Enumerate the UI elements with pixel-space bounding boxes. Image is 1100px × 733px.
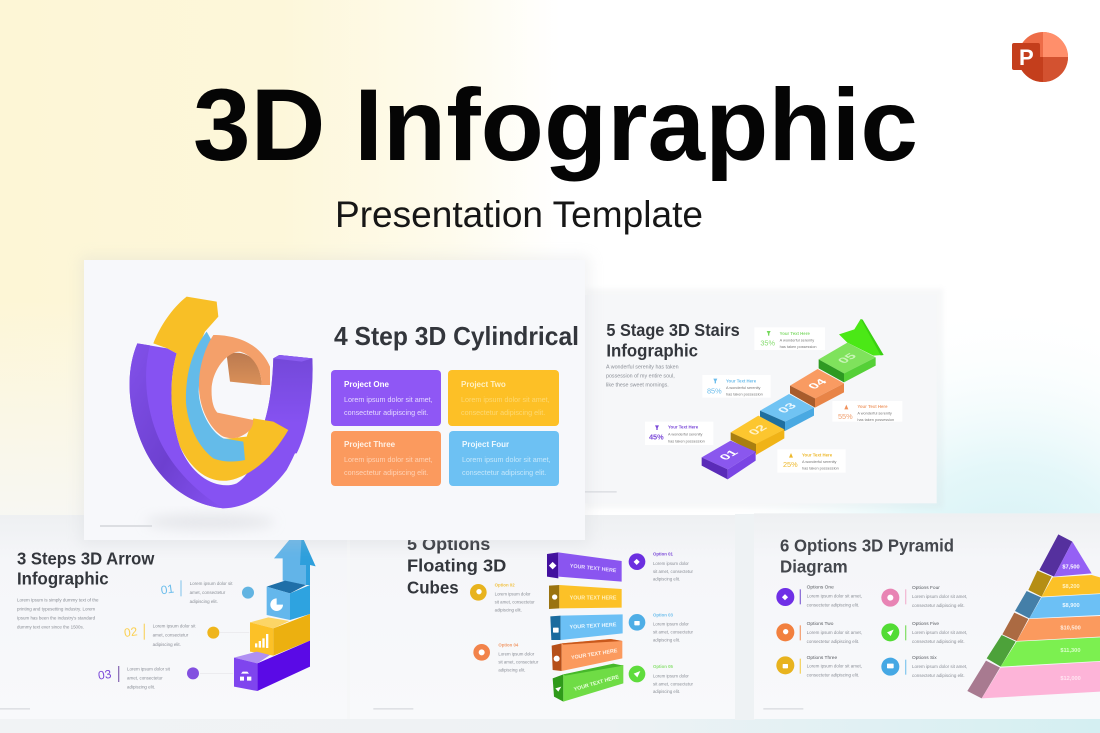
step label 02: amet, consectetur bbox=[153, 633, 189, 638]
step 02: 02 bbox=[745, 423, 770, 437]
option 03 bbox=[629, 612, 693, 642]
layer: $8,200 bbox=[1028, 571, 1100, 597]
callout: 35%: A wonderful serenity bbox=[780, 338, 814, 342]
callout: 35%: Your Text Here bbox=[780, 331, 810, 336]
option five: Lorem ipsum dolor sit amet, bbox=[912, 630, 967, 635]
card: Project One: Project One bbox=[344, 380, 389, 389]
layer: $8,200: $8,200 bbox=[1062, 584, 1080, 590]
arrow description: Lorem Ipsum is simply dummy text of the bbox=[17, 597, 99, 602]
option six: Options Six bbox=[912, 655, 937, 661]
callout: 85% bbox=[702, 375, 771, 398]
step 05 bbox=[819, 343, 876, 382]
panel: 5 options floating 3D cubes bbox=[350, 515, 735, 719]
stairs description: like these sweet mornings. bbox=[606, 382, 669, 388]
option six: consectetur adipiscing elit. bbox=[912, 673, 965, 678]
heading: cubes: 5 Options bbox=[407, 534, 490, 554]
step label 01: 01 bbox=[160, 582, 175, 597]
panel: 5 stage 3D stairs: Infographic bbox=[606, 340, 698, 360]
option 01: Lorem ipsum dolor bbox=[653, 561, 689, 566]
step label 02: Lorem ipsum dolor sit bbox=[153, 624, 196, 629]
card: Project Four: Project Four bbox=[462, 440, 509, 449]
option 05 bbox=[629, 664, 693, 694]
panel: 5 options floating 3D cubes: Cubes bbox=[407, 578, 459, 598]
layer: $10,500 bbox=[1002, 613, 1100, 641]
option four bbox=[881, 585, 967, 608]
option 04: adipiscing elit. bbox=[498, 667, 526, 672]
layer: $8,900: $8,900 bbox=[1062, 603, 1080, 609]
option 03: sit amet, consectetur bbox=[653, 630, 693, 635]
option 01: Option 01 bbox=[653, 552, 674, 557]
layer: $7,500 bbox=[1039, 534, 1092, 577]
card: Project Three: Project Three bbox=[344, 440, 396, 449]
option 04: Option 04 bbox=[498, 642, 519, 647]
option 03: Lorem ipsum dolor bbox=[653, 622, 689, 627]
yellow arrow ring bbox=[153, 297, 288, 481]
card: Project One: Lorem ipsum dolor sit amet, bbox=[344, 395, 433, 404]
green cube bbox=[553, 664, 623, 702]
blue cube: YOUR TEXT HERE bbox=[569, 622, 617, 631]
green cube: YOUR TEXT HERE bbox=[573, 674, 620, 693]
blue cube bbox=[267, 581, 310, 620]
card: Project Four: consectetur adipiscing elit. bbox=[462, 468, 546, 477]
arrow description: dummy text ever since the 1500s. bbox=[17, 625, 84, 630]
3D arrow head bbox=[274, 535, 316, 585]
heading: cylindrical: 4 Step 3D Cylindrical bbox=[334, 321, 579, 351]
option 01: sit amet, consectetur bbox=[653, 569, 693, 574]
option 02: sit amet, consectetur bbox=[495, 600, 535, 605]
option 05: adipiscing elit. bbox=[653, 689, 680, 694]
option 05: Option 05 bbox=[653, 664, 674, 669]
step label 01: adipiscing elit. bbox=[190, 599, 218, 604]
callout: 45%: 45% bbox=[649, 433, 664, 442]
option three: Lorem ipsum dolor sit amet, bbox=[807, 664, 862, 669]
step label 03: Lorem ipsum dolor sit bbox=[127, 666, 171, 671]
card: Project Two bbox=[448, 370, 559, 426]
option 02: adipiscing elit. bbox=[495, 607, 522, 612]
option five bbox=[881, 621, 967, 644]
option four: consectetur adipiscing elit. bbox=[912, 603, 965, 608]
step label 01 bbox=[160, 580, 254, 604]
callout: 25%: 25% bbox=[783, 460, 798, 469]
card: Project Two: Project Two bbox=[461, 380, 506, 389]
option 01: adipiscing elit. bbox=[653, 577, 680, 582]
callout: 45%: A wonderful serenity bbox=[668, 432, 703, 436]
option five: consectetur adipiscing elit. bbox=[912, 639, 965, 644]
option 03: Option 03 bbox=[653, 612, 674, 617]
step 03: 03 bbox=[774, 401, 799, 415]
option 04: Lorem ipsum dolor bbox=[498, 652, 535, 657]
callout: 55% bbox=[832, 401, 902, 422]
icon: bar chart bbox=[255, 634, 268, 648]
layer: $7,500: $7,500 bbox=[1062, 564, 1080, 570]
layer: $11,300 bbox=[987, 635, 1100, 667]
option 02 bbox=[470, 582, 535, 612]
option two: consectetur adipiscing elit. bbox=[807, 639, 859, 644]
stairs description: possession of my entire soul, bbox=[606, 374, 675, 380]
callout: 85%: 85% bbox=[707, 386, 722, 395]
panel: 5 options floating 3D cubes: Floating 3D bbox=[407, 556, 506, 576]
step label 03: adipiscing elit. bbox=[127, 685, 155, 690]
step label 01: amet, consectetur bbox=[190, 590, 226, 595]
blue ring bbox=[186, 332, 245, 462]
card: Project Four bbox=[449, 431, 559, 486]
step 04: 04 bbox=[804, 376, 831, 391]
card: Project Two: consectetur adipiscing elit. bbox=[461, 408, 545, 417]
heading: stairs: 5 Stage 3D Stairs bbox=[606, 320, 740, 340]
step 04 bbox=[790, 369, 844, 408]
callout: 25%: Your Text Here bbox=[802, 452, 833, 457]
panel: 6 options 3D pyramid: Diagram bbox=[780, 556, 848, 576]
card: Project Three bbox=[331, 431, 441, 486]
option 04: sit amet, consectetur bbox=[498, 660, 539, 665]
callout: 85%: A wonderful serenity bbox=[726, 386, 761, 390]
layer: $12,000: $12,000 bbox=[1060, 676, 1081, 682]
card: Project Two: Lorem ipsum dolor sit amet, bbox=[461, 395, 550, 404]
purple cube bbox=[547, 552, 622, 582]
option 02: Option 02 bbox=[495, 582, 515, 587]
card: Project Three: Lorem ipsum dolor sit amet, bbox=[344, 455, 433, 464]
option 03: adipiscing elit. bbox=[653, 637, 680, 642]
panel: 3 steps 3D arrow: Infographic bbox=[17, 569, 109, 589]
purple cube: YOUR TEXT HERE bbox=[569, 563, 617, 574]
step label 03: amet, consectetur bbox=[127, 676, 163, 681]
icon: PowerPoint logo: P bbox=[1019, 45, 1034, 70]
option four: Options Four bbox=[912, 585, 940, 591]
step label 02 bbox=[123, 624, 249, 647]
panel: 5 stage 3D stairs bbox=[585, 288, 943, 508]
option three: consectetur adipiscing elit. bbox=[807, 673, 859, 678]
option one: Lorem ipsum dolor sit amet, bbox=[807, 594, 862, 599]
icon: pie chart bbox=[270, 598, 283, 611]
callout: 55%: 55% bbox=[838, 412, 853, 421]
step 05: 05 bbox=[834, 351, 859, 365]
option five: Options Five bbox=[912, 621, 939, 627]
stair arrowhead bbox=[839, 319, 884, 356]
step label 03: 03 bbox=[97, 667, 113, 683]
stairs description bbox=[606, 365, 679, 388]
orange cube: YOUR TEXT HERE bbox=[571, 648, 618, 661]
option 01 bbox=[629, 552, 693, 582]
callout: 35%: has taken possession bbox=[780, 345, 816, 349]
step 02 bbox=[731, 416, 784, 455]
layer: $8,900 bbox=[1015, 591, 1100, 618]
card: Project Three: consectetur adipiscing elit. bbox=[344, 468, 428, 477]
option 04 bbox=[473, 642, 539, 672]
purple cube bbox=[234, 641, 310, 691]
callout: 85%: has taken possession bbox=[726, 393, 763, 397]
icon: people bbox=[240, 672, 251, 681]
heading: arrow: 3 Steps 3D Arrow bbox=[17, 548, 155, 568]
step label 03 bbox=[97, 666, 233, 690]
arrow description bbox=[17, 597, 99, 630]
panel: 6 options 3D pyramid bbox=[754, 513, 1100, 719]
arrow description: Ipsum has been the industry's standard bbox=[17, 616, 96, 621]
option six: Lorem ipsum dolor sit amet, bbox=[912, 664, 967, 669]
stairs description: A wonderful serenity has taken bbox=[606, 365, 679, 371]
callout: 55%: A wonderful serenity bbox=[857, 411, 892, 415]
step label 02: 02 bbox=[123, 624, 139, 640]
callout: 25%: has taken possession bbox=[802, 467, 839, 471]
orange ring bbox=[199, 335, 270, 438]
orange cube bbox=[552, 639, 622, 671]
callout: 45%: Your Text Here bbox=[668, 425, 699, 430]
step 01: 01 bbox=[716, 448, 741, 462]
option one bbox=[776, 585, 862, 608]
callout: 45%: has taken possession bbox=[668, 439, 705, 443]
yellow cube: YOUR TEXT HERE bbox=[570, 596, 617, 602]
purple ring bbox=[130, 343, 313, 508]
title: 3D Infographic bbox=[193, 68, 918, 182]
card: Project One: consectetur adipiscing elit. bbox=[344, 408, 428, 417]
option one: consectetur adipiscing elit. bbox=[807, 603, 859, 608]
option 05: sit amet, consectetur bbox=[653, 681, 693, 686]
step label 01: Lorem ipsum dolor sit bbox=[190, 581, 233, 586]
card: Project Four: Lorem ipsum dolor sit amet, bbox=[462, 455, 551, 464]
panel: 4 step 3D cylindrical bbox=[80, 256, 590, 546]
layer: $12,000 bbox=[967, 661, 1100, 698]
layer: $10,500: $10,500 bbox=[1060, 625, 1081, 631]
layer: $11,300: $11,300 bbox=[1060, 648, 1080, 654]
yellow cube bbox=[549, 585, 622, 609]
panel: 3 steps 3D arrow bbox=[0, 515, 347, 719]
option one: Options One bbox=[807, 585, 834, 591]
option three: Options Three bbox=[807, 655, 837, 661]
callout: 55%: Your Text Here bbox=[857, 404, 888, 409]
yellow cube bbox=[250, 614, 310, 656]
option three bbox=[776, 655, 862, 678]
step 03 bbox=[760, 394, 814, 431]
pyramid chart bbox=[967, 534, 1100, 698]
step 01 bbox=[702, 441, 756, 479]
option two: Lorem ipsum dolor sit amet, bbox=[807, 630, 862, 635]
callout: 55%: has taken possession bbox=[857, 418, 894, 422]
heading: pyramid: 6 Options 3D Pyramid bbox=[780, 536, 954, 556]
subtitle: Presentation Template bbox=[335, 194, 703, 235]
arrow description: printing and typesetting industry. Lorem bbox=[17, 606, 95, 611]
callout: 35%: 35% bbox=[760, 339, 775, 348]
step label 02: adipiscing elit. bbox=[153, 642, 181, 647]
callout: 25% bbox=[777, 449, 846, 473]
card: Project One bbox=[331, 370, 441, 426]
option 02: Lorem ipsum dolor bbox=[495, 592, 531, 597]
3D cylindrical chart bbox=[130, 297, 313, 508]
callout: 45% bbox=[645, 422, 713, 445]
blue cube bbox=[550, 614, 623, 640]
option four: Lorem ipsum dolor sit amet, bbox=[912, 594, 967, 599]
callout: 25%: A wonderful serenity bbox=[802, 460, 837, 464]
callout: 35% bbox=[754, 327, 825, 350]
option 05: Lorem ipsum dolor bbox=[653, 673, 689, 678]
option two: Options Two bbox=[807, 621, 834, 627]
icon: PowerPoint logo bbox=[1012, 32, 1068, 82]
option six bbox=[881, 655, 967, 678]
callout: 85%: Your Text Here bbox=[726, 378, 757, 383]
option two bbox=[776, 621, 862, 644]
